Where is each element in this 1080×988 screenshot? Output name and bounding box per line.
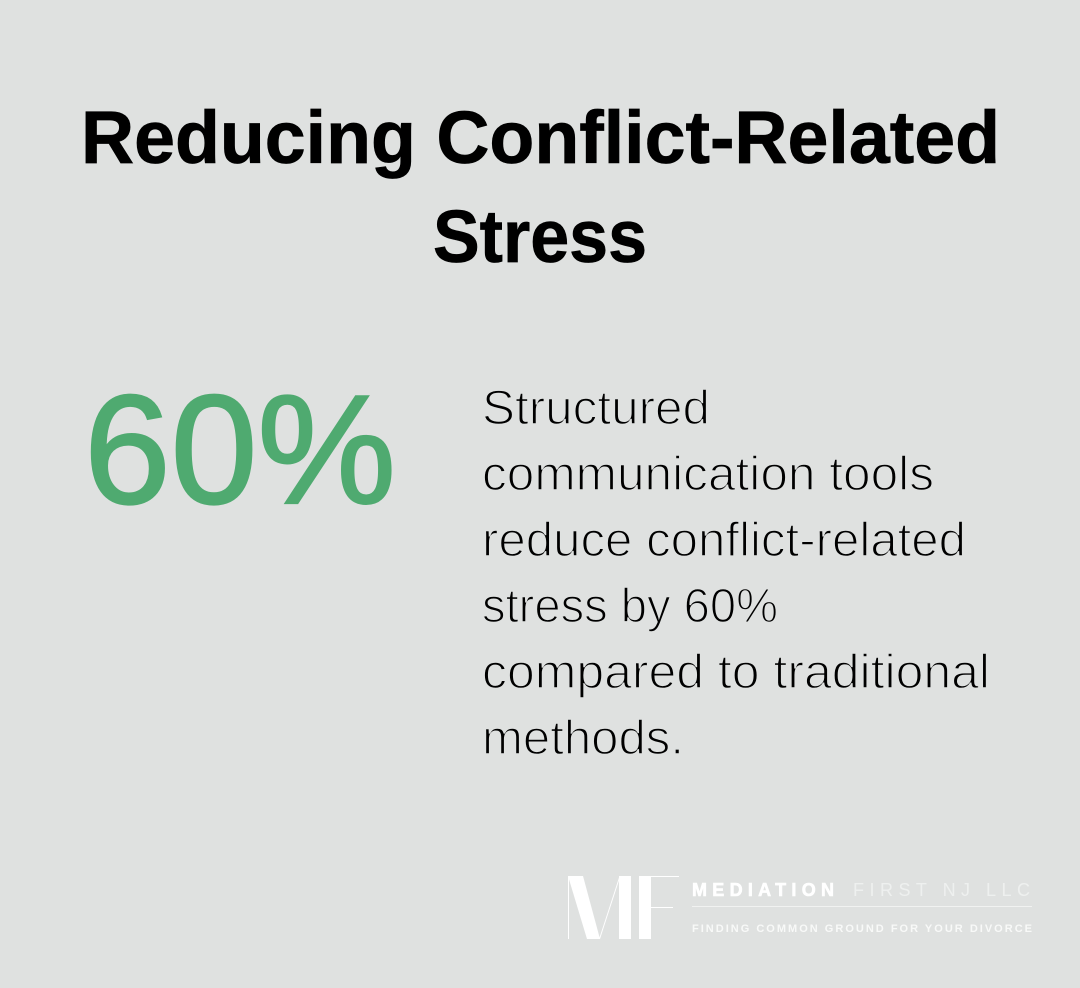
description text: methods. (482, 711, 684, 765)
logo mark: MF monogram (568, 876, 679, 939)
logo wordmark: FINDING COMMON GROUND FOR YOUR DIVORCE (692, 923, 1032, 935)
description text: Structured (482, 381, 710, 435)
big stat: 60%: 60% (84, 363, 396, 536)
title: Stress (433, 195, 647, 278)
logo: Mediation First NJ LLC (568, 876, 1032, 939)
description text: compared to traditional (482, 645, 990, 699)
description text: communication tools (482, 447, 934, 501)
logo wordmark: MEDIATION (692, 880, 834, 900)
title: Reducing Conflict-Related (81, 96, 1000, 179)
description text (482, 381, 990, 765)
description text: reduce conflict-related (482, 513, 966, 567)
logo wordmark (692, 880, 1032, 935)
title (81, 96, 1000, 278)
description text: stress by 60% (482, 579, 778, 633)
logo wordmark: FIRST NJ LLC (853, 880, 1030, 900)
